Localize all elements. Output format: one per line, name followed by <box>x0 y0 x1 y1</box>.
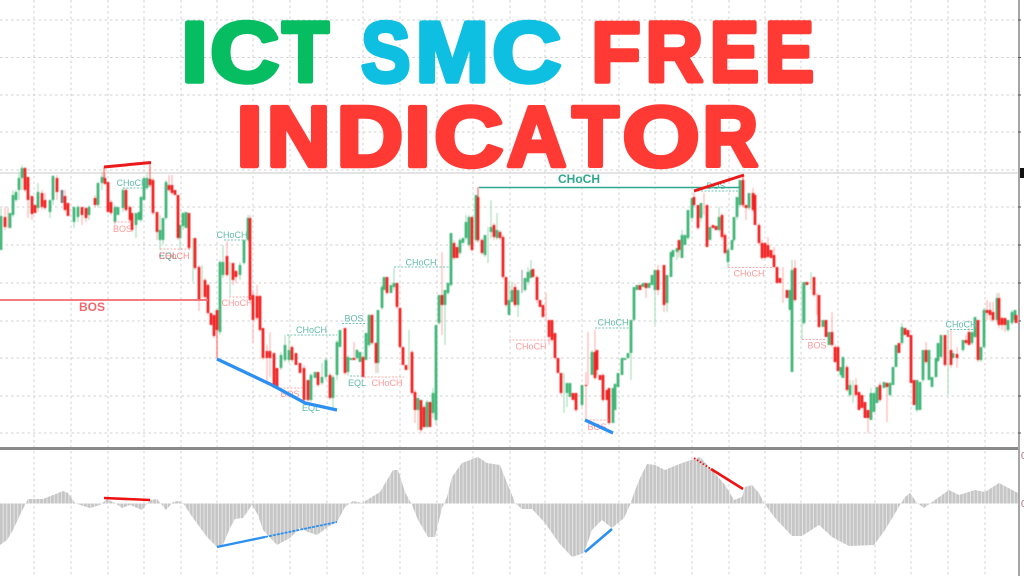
label: CHoCH pink: CHoCH <box>221 298 253 308</box>
oscillator trendline: blue middle <box>585 529 612 552</box>
trendline: red top left <box>104 162 151 167</box>
title word: FREE: E <box>710 5 759 100</box>
label: CHoCH teal: CHoCH <box>296 325 327 335</box>
title word: INDICATOR: A <box>507 90 566 185</box>
oscillator trendline: blue left <box>217 522 337 547</box>
title word: INDICATOR: T <box>572 90 619 185</box>
oscillator axis labels <box>1021 451 1024 510</box>
title word: INDICATOR: D <box>336 90 403 185</box>
label: BOS pink: BOS <box>807 340 827 350</box>
CHoCH level line and label: CHoCH <box>558 172 600 186</box>
trendline: blue lower left <box>217 359 337 410</box>
trendline: red top right <box>694 175 744 191</box>
label: CHoCH teal: CHoCH <box>945 320 977 330</box>
label: CHoCH pink <box>728 268 774 278</box>
price axis <box>1018 0 1024 576</box>
title word: INDICATOR: R <box>702 90 758 185</box>
oscillator trendline: red right <box>694 458 743 489</box>
BOS level line and label: BOS <box>79 300 105 314</box>
title <box>181 5 814 185</box>
label: BOS pink: BOS <box>280 389 300 399</box>
label: BOS pink <box>586 420 610 432</box>
oscillator histogram <box>0 457 1018 557</box>
label: CHoCH pink: CHoCH <box>371 378 403 388</box>
label: CHoCH teal: CHoCH <box>116 178 148 188</box>
title word: INDICATOR: C <box>434 90 504 185</box>
panel divider <box>0 447 1018 450</box>
title word: ICT: C <box>210 5 280 100</box>
label: EQL teal: EQL <box>302 403 320 413</box>
title word: SMC: M <box>416 5 489 100</box>
title word: INDICATOR: N <box>267 90 331 185</box>
title word: FREE: R <box>645 5 703 100</box>
label: BOS teal: BOS <box>344 314 364 324</box>
oscillator trendline: red left <box>104 498 150 500</box>
title word: FREE: E <box>765 5 814 100</box>
title word: SMC: S <box>361 5 410 100</box>
label: CHoCH pink: CHoCH <box>733 268 765 278</box>
title word: ICT: I <box>181 5 208 100</box>
label: CHoCH teal <box>287 325 337 335</box>
label: EQL teal: EQL <box>348 378 366 388</box>
labels: EQL and CHoCH overlap: CHoCH <box>158 251 190 261</box>
title word: INDICATOR: I <box>236 90 263 185</box>
title word: ICT: T <box>282 5 329 100</box>
label: BOS pink: BOS <box>113 224 132 234</box>
label: CHoCH teal: CHoCH <box>597 318 629 328</box>
labels: EQL and CHoCH overlap: EQL <box>159 251 177 261</box>
label: BOS teal <box>694 181 740 191</box>
label: CHoCH teal <box>394 258 451 268</box>
label: CHoCH teal: CHoCH <box>216 230 248 240</box>
candlestick chart <box>1 162 1018 433</box>
title word: SMC: C <box>492 5 562 100</box>
title word: INDICATOR: I <box>404 90 431 185</box>
label: CHoCH pink: CHoCH <box>515 342 547 352</box>
trendline: blue lower middle <box>585 420 613 433</box>
label: BOS teal: BOS <box>706 181 726 191</box>
label: BOS pink: BOS <box>587 422 607 432</box>
label: CHoCH pink <box>509 340 550 352</box>
label: CHoCH teal: CHoCH <box>405 258 437 268</box>
title word: FREE: F <box>591 5 641 100</box>
title word: INDICATOR: O <box>622 90 700 185</box>
